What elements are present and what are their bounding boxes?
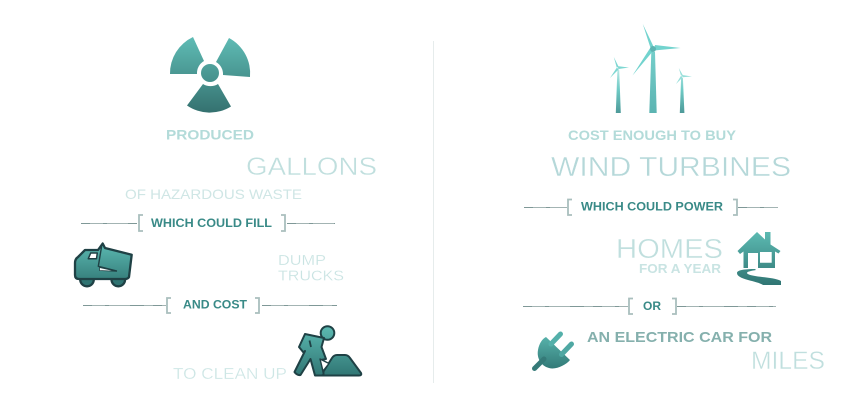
icon: worker with shovel	[294, 326, 361, 376]
text: dump trucks: DUMP	[278, 252, 326, 269]
text: miles: MILES	[751, 347, 825, 375]
heading: produced: PRODUCED	[166, 126, 254, 142]
divider: and cost	[83, 298, 337, 313]
text: an electric car for: AN ELECTRIC CAR FOR	[587, 329, 772, 346]
text: gallons: GALLONS	[246, 153, 377, 181]
icon: wind turbines	[610, 24, 692, 113]
text: of hazardous waste: OF HAZARDOUS WASTE	[125, 186, 302, 202]
divider: which could power: WHICH COULD POWER	[581, 202, 724, 214]
divider: or	[523, 298, 776, 314]
text: dump trucks	[278, 252, 344, 285]
heading: cost enough to buy: COST ENOUGH TO BUY	[568, 127, 737, 143]
vertical divider	[432, 41, 434, 383]
panel: wind turbines	[523, 24, 825, 375]
icon: radiation symbol	[170, 37, 250, 113]
divider: and cost: AND COST	[183, 300, 247, 312]
text: to clean up: TO CLEAN UP	[173, 366, 287, 383]
icon: electric plug	[534, 334, 572, 368]
text: dump trucks: TRUCKS	[278, 268, 344, 285]
divider: which could power	[524, 200, 778, 215]
text: homes: HOMES	[616, 233, 723, 264]
divider: which could fill	[81, 215, 335, 231]
text: wind turbines: WIND TURBINES	[551, 151, 791, 182]
text: for a year: FOR A YEAR	[639, 261, 722, 276]
divider: which could fill: WHICH COULD FILL	[151, 218, 272, 230]
icon: house with path	[737, 232, 781, 285]
icon: dump truck	[75, 244, 132, 286]
divider: or: OR	[643, 301, 662, 313]
panel: hazardous waste	[75, 37, 377, 383]
